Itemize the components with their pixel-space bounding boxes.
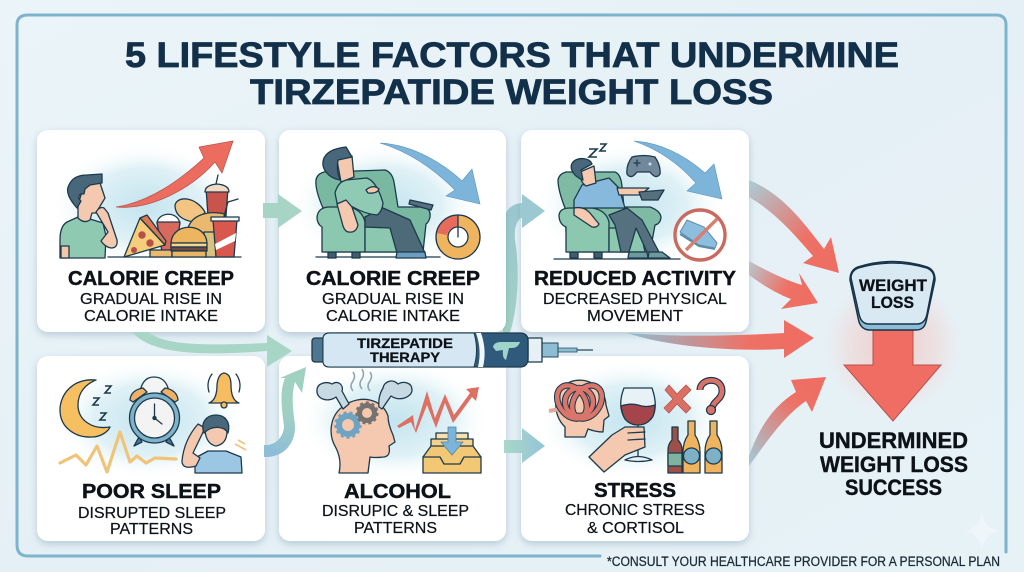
icon: sleep wave line	[60, 432, 176, 472]
panel: alcohol	[279, 356, 506, 541]
big down arrow	[844, 328, 941, 421]
heading: REDUCED ACTIVITY	[534, 268, 737, 290]
icon: person thinking	[60, 174, 117, 258]
icon: question mark	[700, 380, 722, 414]
description	[80, 291, 222, 325]
arrow: stress to weight loss	[749, 377, 826, 466]
arrow: pen to weight loss	[627, 320, 814, 358]
description: DISRUPTED SLEEP	[78, 505, 226, 522]
pen label: TIRZEPATIDE	[357, 336, 453, 351]
title: TIRZEPATIDE WEIGHT LOSS	[250, 73, 773, 112]
arrow: curve between card 2 and card 3	[503, 203, 522, 336]
icon: person holding head	[182, 415, 246, 473]
pen logo	[493, 342, 520, 360]
heading: CALORIE CREEP	[306, 268, 480, 290]
pen label: THERAPY	[370, 350, 440, 365]
arrow: card 4 curve up to pen	[264, 367, 306, 457]
description: GRADUAL RISE IN	[80, 291, 222, 308]
description: CALORIE INTAKE	[326, 308, 460, 325]
icon: alarm clock	[130, 377, 180, 446]
icon: head with knot	[549, 380, 609, 437]
icon: red zigzag arrow	[397, 387, 479, 433]
result text: SUCCESS	[845, 475, 942, 500]
arrow: reduced activity to weight loss	[749, 180, 839, 273]
icon: wine glass in hand	[589, 388, 655, 472]
description	[565, 502, 705, 537]
arrow: card 5 to card 6	[504, 428, 545, 463]
result text: UNDERMINED	[819, 428, 968, 453]
icon: person on armchair with remote	[554, 159, 680, 259]
title	[125, 36, 899, 112]
description: PATTERNS	[354, 520, 437, 537]
result text	[819, 428, 968, 500]
icon: inbox tray	[423, 427, 481, 473]
description	[322, 291, 464, 325]
arrow: card 1 to card 2	[263, 194, 302, 228]
icon: steam clouds	[317, 369, 412, 409]
description: PATTERNS	[110, 521, 193, 538]
weight loss button	[850, 262, 935, 330]
icon: donut chart	[436, 215, 480, 259]
description	[322, 503, 469, 537]
panel: poor sleep	[37, 356, 265, 541]
arrow: second red arrow	[749, 261, 818, 309]
description: GRADUAL RISE IN	[322, 291, 464, 308]
icon: blue falling arrow	[380, 143, 480, 204]
title: 5 LIFESTYLE FACTORS THAT UNDERMINE	[125, 36, 899, 75]
result text: WEIGHT LOSS	[820, 452, 968, 477]
description: DISRUPIC & SLEEP	[322, 503, 469, 520]
weight loss button: WEIGHT	[859, 276, 928, 295]
weight loss button: LOSS	[871, 293, 914, 312]
arrow: card 1 bottom curve to pen	[132, 332, 292, 367]
icon: red rising arrow	[116, 141, 233, 207]
description	[78, 505, 226, 538]
glow behind weight loss	[823, 275, 963, 415]
icon: no shoe prohibition	[675, 210, 725, 260]
panel: reduced activity	[521, 130, 749, 332]
pen label	[357, 336, 453, 365]
icon: head with gears	[331, 399, 395, 473]
heading: STRESS	[594, 480, 676, 502]
panel: calorie creep 2	[279, 130, 506, 332]
description	[543, 291, 727, 325]
icon: red x	[664, 385, 691, 413]
panel: stress	[521, 356, 749, 541]
tirzepatide pen	[312, 333, 593, 367]
description: CHRONIC STRESS	[565, 502, 705, 519]
description: DECREASED PHYSICAL	[543, 291, 727, 308]
arrow: into card 3	[520, 194, 545, 228]
description: & CORTISOL	[587, 520, 684, 537]
heading: ALCOHOL	[344, 481, 451, 503]
description: CALORIE INTAKE	[84, 308, 218, 325]
icon: blue falling arrow	[634, 141, 722, 199]
icon: fast food pile	[108, 175, 241, 257]
heading: POOR SLEEP	[82, 481, 221, 503]
icon: gamepad	[627, 156, 660, 177]
icon: sleep zzz	[93, 386, 111, 420]
panel: calorie creep 1	[37, 130, 265, 332]
heading: CALORIE CREEP	[68, 268, 234, 290]
icon: bell	[208, 373, 240, 408]
sparkle	[965, 513, 999, 549]
icon: sleeping zzz	[589, 144, 606, 157]
icon: crescent moon	[60, 380, 110, 437]
icon: person slumped on armchair	[316, 147, 440, 258]
icon: bottles	[668, 421, 722, 473]
description: MOVEMENT	[587, 308, 683, 325]
